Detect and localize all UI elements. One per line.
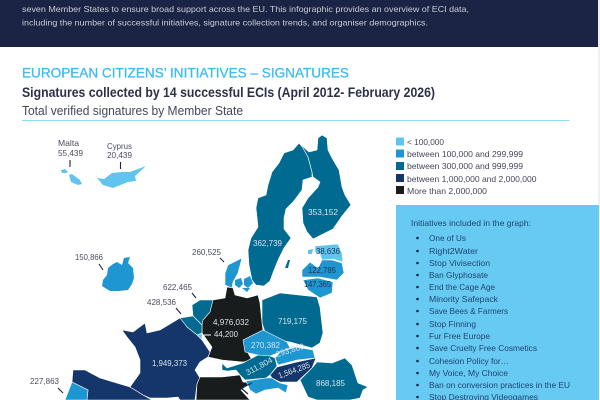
Romania — [300, 358, 368, 400]
panel: initiatives included: Save Cruelty Free Cosmetics — [429, 344, 537, 353]
Ireland — [102, 257, 134, 291]
label: Luxembourg — [204, 330, 238, 339]
label: Netherlands — [163, 283, 196, 298]
panel: initiatives included: Minority Safepack — [429, 295, 499, 304]
Luxembourg — [197, 333, 202, 340]
panel: initiatives included — [396, 205, 599, 400]
Estonian islands — [308, 249, 313, 254]
Slovakia — [275, 347, 315, 365]
label: Austria: 311,804 — [244, 355, 275, 377]
Finland — [299, 135, 351, 239]
Hungary — [270, 358, 316, 382]
panel: initiatives included: Cohesion Policy for… — [429, 357, 509, 366]
Germany — [202, 287, 263, 362]
panel: initiatives included: End the Cage Age — [429, 283, 495, 292]
Czechia — [243, 330, 290, 356]
Belgium — [180, 316, 202, 335]
label: Lithuania: 147,365 — [304, 280, 331, 289]
title: EUROPEAN CITIZENS’ INITIATIVES – SIGNATURES — [22, 64, 349, 80]
legend: between 300,000 and 999,999 — [407, 162, 523, 171]
label: Germany: 4,976,032 — [213, 318, 249, 327]
label: Romania: 868,185 — [316, 379, 345, 388]
label: Sweden: 362,739 — [253, 239, 282, 248]
Portugal — [65, 382, 88, 400]
Malta — [61, 169, 82, 185]
panel: initiatives included: Right2Water — [429, 247, 478, 256]
label: Ireland — [75, 253, 103, 270]
legend: between 1,000,000 and 2,000,000 — [407, 175, 537, 184]
Denmark — [225, 258, 253, 292]
Croatia marker — [241, 383, 252, 394]
chart heading: Total verified signatures by Member State — [22, 104, 243, 118]
Austria — [222, 355, 277, 380]
panel: initiatives included: My Voice, My Choice — [429, 369, 508, 378]
Cyprus — [97, 166, 146, 188]
label: Cyprus: 20,439 — [107, 151, 132, 160]
label: Hungary: 1,564,285 — [277, 360, 312, 380]
label: Czechia: 270,382 — [251, 341, 280, 350]
label: Malta: Malta — [58, 139, 79, 148]
label: Luxembourg: 44,200 — [214, 330, 238, 339]
Netherlands — [192, 300, 213, 325]
label: Portugal — [30, 377, 63, 393]
header banner: seven Member States to ensure broad support across the EU. This infographic provides an overview of ECI data, — [22, 5, 469, 14]
label: Latvia: 122,785 — [308, 266, 336, 275]
map of EU member states — [61, 135, 368, 400]
Slovenia and Croatia — [246, 378, 288, 394]
panel: initiatives included: Fur Free Europe — [429, 332, 490, 341]
header banner — [0, 0, 598, 47]
label: Cyprus — [107, 142, 132, 169]
label: France: 1,949,373 — [152, 359, 187, 368]
label: Estonia: 38,636 — [316, 247, 340, 256]
panel: initiatives included: Ban Glyphosate — [429, 271, 488, 280]
Estonia — [315, 244, 343, 262]
label: Portugal: 227,863 — [30, 377, 59, 386]
label: Netherlands: 622,465 — [163, 283, 192, 292]
legend — [396, 138, 537, 196]
Poland — [262, 293, 323, 348]
label: Malta — [58, 139, 83, 167]
panel: initiatives included: Initiatives included in the graph: — [411, 219, 531, 228]
panel: initiatives included: Stop Vivisection — [429, 259, 490, 268]
label: Denmark: 260,525 — [192, 248, 221, 257]
panel: initiatives included: Save Bees & Farmers — [429, 307, 508, 316]
label: Finland: 353,152 — [308, 208, 338, 217]
label: Belgium: 428,536 — [147, 298, 176, 307]
label: Malta: 55,439 — [58, 149, 83, 158]
Lithuania — [303, 278, 333, 298]
Gotland — [285, 260, 290, 268]
legend: More than 2,000,000 — [407, 187, 487, 196]
label: Denmark — [192, 248, 224, 262]
Latvia — [302, 260, 344, 280]
label: Belgium — [147, 298, 181, 314]
Italy — [196, 375, 252, 400]
label: Slovakia: 293,869 — [275, 342, 306, 359]
label: Poland: 719,175 — [278, 317, 307, 326]
Spain — [72, 370, 152, 400]
header banner: including the number of successful initiatives, signature collection trends, and organiser demographics. — [22, 18, 428, 28]
subtitle: Signatures collected by 14 successful ECIs (April 2012- February 2026) — [22, 85, 435, 100]
panel: initiatives included: Stop Finning — [429, 320, 476, 329]
panel: initiatives included: Ban on conversion practices in the EU — [429, 381, 570, 390]
panel: initiatives included: One of Us — [429, 234, 466, 243]
legend: < 100,000 — [407, 138, 444, 147]
label: Ireland: 150,866 — [75, 253, 103, 262]
Sweden — [248, 143, 312, 286]
France — [122, 318, 210, 400]
label: Cyprus: Cyprus — [107, 142, 132, 151]
legend: between 100,000 and 299,999 — [407, 150, 523, 159]
